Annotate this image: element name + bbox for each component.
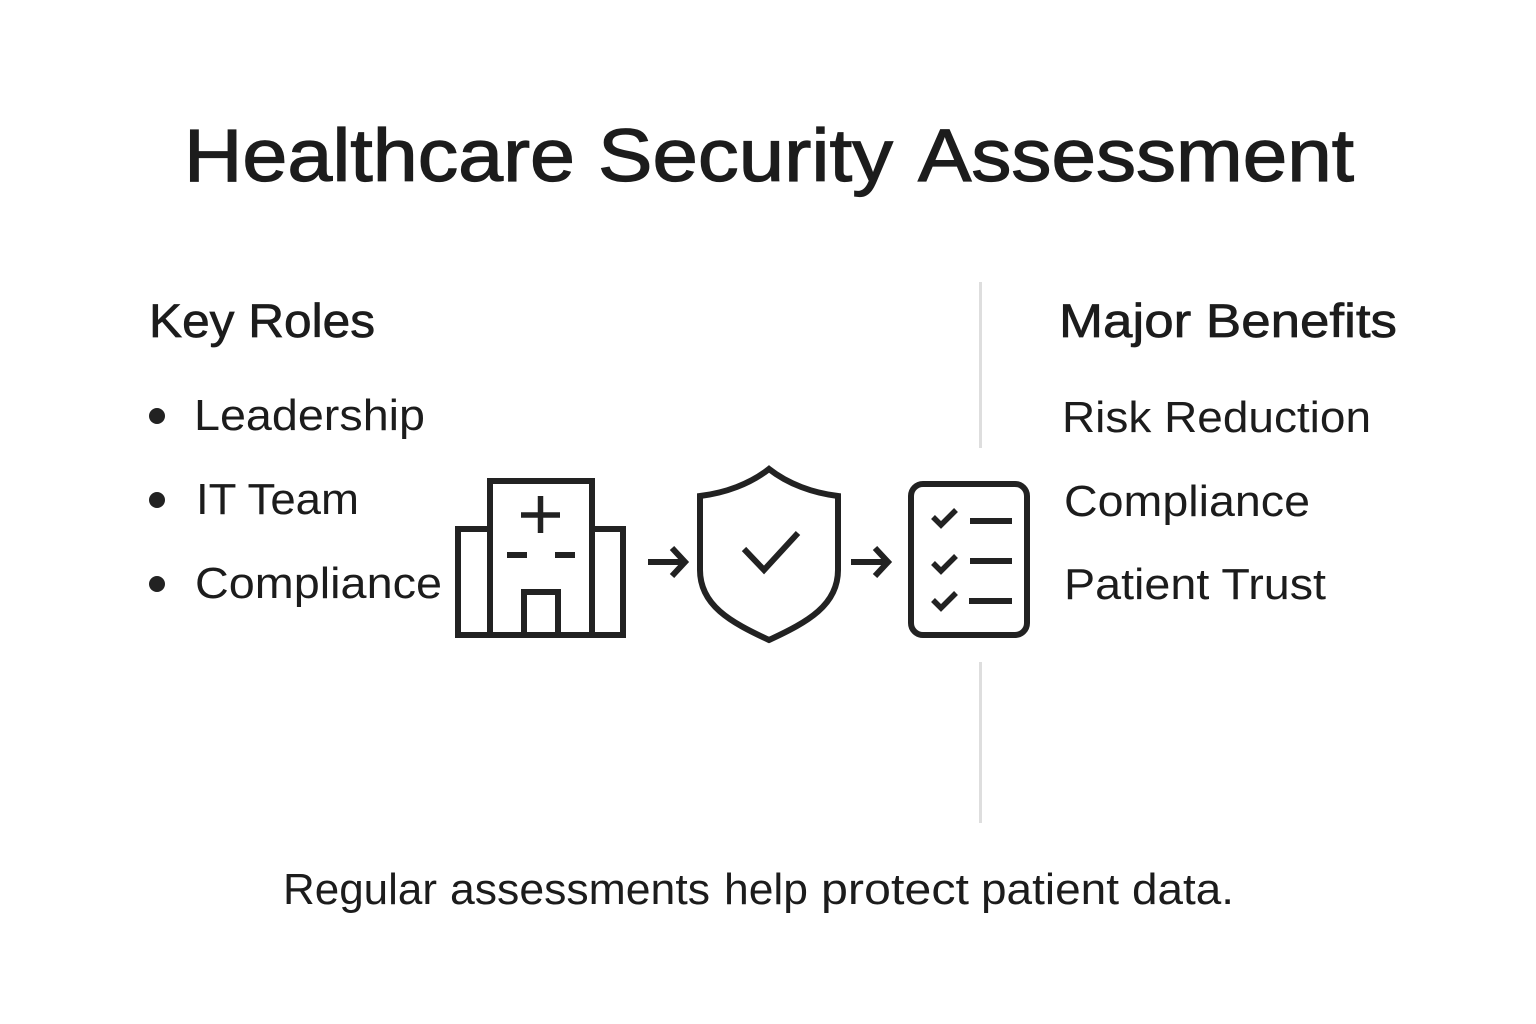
title: Assessment [918,114,1354,197]
title: Healthcare [184,114,575,197]
heading: major benefits: Major Benefits [1059,294,1397,347]
icon: checklist [911,484,1027,635]
footer statement: data. [1132,865,1234,914]
list item: leadership: Leadership [194,391,425,440]
footer statement: help [724,865,808,914]
heading: key roles: Key Roles [149,294,375,347]
list item: compliance: Compliance [195,559,442,608]
arrow: hospital to shield [648,548,685,576]
arrow: shield to checklist [851,548,888,576]
icon: shield with check [700,469,838,640]
benefit: risk reduction: Risk Reduction [1062,393,1371,442]
panel: key roles [149,294,442,608]
divider line lower [979,662,982,823]
icon: hospital [458,481,623,635]
title: Security [598,114,893,197]
divider line upper [979,282,982,448]
benefit: compliance: Compliance [1064,477,1310,526]
footer statement: protect [821,865,969,914]
footer statement: patient [981,865,1119,914]
footer statement: Regular [283,865,437,914]
panel: major benefits [1059,294,1397,609]
list item: IT team: IT Team [196,475,359,524]
footer statement: assessments [450,865,710,914]
benefit: patient trust: Patient Trust [1064,560,1326,609]
